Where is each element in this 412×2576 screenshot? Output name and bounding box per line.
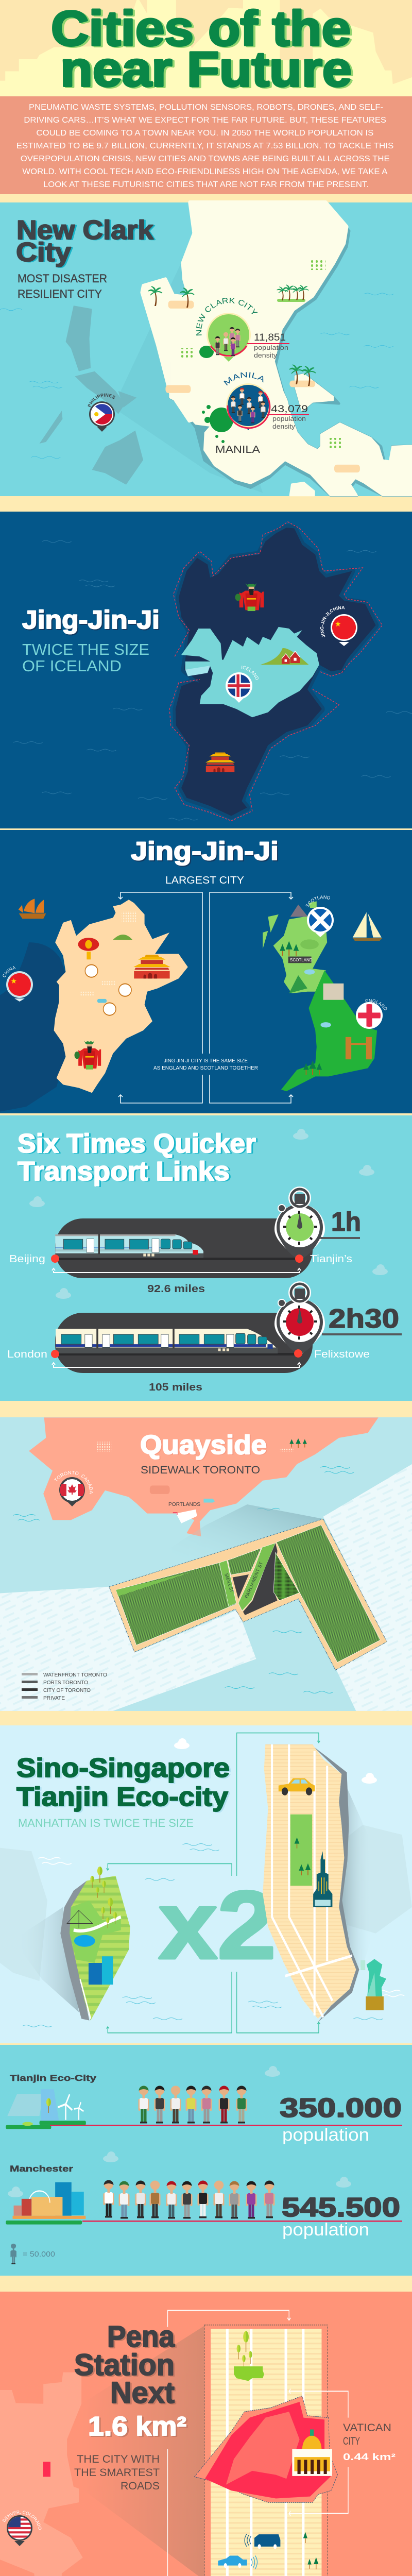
map icons: [133, 955, 170, 978]
comparison note: AS ENGLAND AND SCOTLAND TOGETHER: [153, 1065, 258, 1071]
Iceland: [181, 627, 319, 717]
pin: China: [320, 606, 357, 646]
panel: Jing-Jin-Ji largest city: [0, 830, 412, 1113]
subheading: [22, 640, 149, 675]
legend: [22, 1672, 107, 1701]
map: Denver area: [0, 2326, 204, 2576]
basilica: [292, 2430, 332, 2476]
heading: Tianjin Eco-city: [16, 1782, 228, 1812]
pin: China: ★: [335, 620, 341, 629]
taxi: [279, 1778, 315, 1795]
stat: New Clark density: density: [254, 352, 278, 359]
label: Scotland: SCOTLAND: [290, 958, 313, 962]
clock: 1h: [274, 1189, 325, 1259]
label: Vatican City: 0.44 km²: [343, 2452, 396, 2462]
clouds: [29, 1129, 388, 1299]
legend: PORTS TORONTO: [43, 1680, 88, 1686]
time: 2h30: 2h30: [329, 1304, 399, 1334]
pin: Toronto Canada: TORONTO, CANADA: [54, 1470, 93, 1494]
stat: New Clark density: 11,851: [254, 332, 286, 343]
pin: Philippines: PHILIPPINES: [88, 394, 115, 407]
houses: [260, 648, 308, 665]
distance: 105 miles: 105 miles: [149, 1382, 202, 1393]
stat: 1.6 km2: 1.6 km²: [88, 2412, 186, 2442]
subheading: MOST DISASTER: [18, 272, 107, 285]
heading: Six Times Quicker: [18, 1129, 256, 1159]
intro text panel: [0, 96, 412, 194]
time: 1h: [320, 1207, 361, 1239]
label: Tianjin Eco-City: Tianjin Eco-City: [10, 2073, 97, 2083]
train: China: [55, 1234, 203, 1258]
boat: [353, 912, 382, 941]
stat: New Clark density: [247, 332, 289, 359]
heading: City: [16, 238, 71, 267]
subheading: RESILIENT CITY: [18, 287, 102, 300]
stat: Manila density: density: [272, 423, 296, 430]
legend: person equals 50.000: = 50.000: [23, 2250, 55, 2259]
pin: China small: CHINA: [3, 966, 15, 977]
clouds: [8, 2066, 351, 2197]
route labels: [9, 1253, 352, 1265]
subheading: MANHATTAN IS TWICE THE SIZE: [18, 1817, 194, 1829]
divider: [0, 828, 412, 830]
row: Manchester people: [103, 2180, 275, 2218]
heading: Station: [74, 2348, 175, 2382]
clock: 2h30: [274, 1284, 325, 1354]
map: Quayside plan: [109, 1519, 387, 1670]
stat: Manila density: population: [272, 415, 306, 422]
route: London to Felixstowe: [52, 1313, 313, 1373]
comparison note: [153, 1058, 258, 1071]
legend: WATERFRONT TORONTO: [43, 1672, 107, 1678]
intro text panel: OVERPOPULATION CRISIS, NEW CITIES AND TOWNS ARE BEING BUILT ALL ACROSS THE: [21, 155, 390, 163]
decorative waves: [13, 540, 412, 820]
train: UK: [56, 1329, 278, 1353]
distance: 92.6 miles: 92.6 miles: [147, 1283, 205, 1295]
label: population: population: [282, 2125, 369, 2145]
map: Scotland and England: [263, 901, 377, 1091]
waves: [13, 1466, 354, 1693]
heading: [74, 2320, 175, 2410]
subheading: THE CITY WITH: [77, 2453, 160, 2465]
map: street plan with Vatican overlay: [195, 2325, 338, 2576]
row: Tianjin people: [138, 2086, 247, 2124]
pin: England: [356, 999, 387, 1029]
route labels: Beijing: [9, 1253, 45, 1265]
subheading: THE SMARTEST: [74, 2467, 160, 2479]
intro text panel: WORLD. WITH COOL TECH AND ECO-FRIENDLINESS HIGH ON THE AGENDA, WE TAKE A: [22, 167, 388, 176]
panel: Jing-Jin-Ji twice the size of Iceland: [0, 512, 412, 828]
palms: [148, 285, 316, 386]
time: 1h: 1h: [331, 1207, 361, 1237]
statue of liberty: [360, 1959, 386, 2010]
header: title on skyline: [0, 0, 412, 97]
panel: Sino-Singapore Tianjin Eco-city: [0, 1725, 412, 2043]
divider: [0, 1113, 412, 1115]
heading: Sino-Singapore: [16, 1753, 230, 1783]
title: [51, 1, 352, 97]
street grid: [0, 1464, 412, 1711]
label: Manila: MANILA: [215, 444, 261, 455]
pin: China small: [3, 966, 33, 1002]
heading: Pena: [107, 2320, 175, 2353]
ship: [19, 899, 46, 919]
heading: Jing-Jin-Ji: [131, 837, 279, 866]
route labels: [7, 1349, 370, 1360]
pin: Scotland: [306, 895, 334, 937]
subheading: LARGEST CITY: [165, 875, 244, 886]
stat: 350.000: 350.000: [280, 2093, 402, 2123]
pin: Philippines: [88, 394, 115, 432]
baseline with bar: [50, 2125, 402, 2126]
map: Philippines and Luzon: [0, 202, 412, 496]
intro text panel: DRIVING CARS…IT’S WHAT WE EXPECT FOR THE FAR FUTURE. BUT, THESE FEATURES: [24, 116, 386, 125]
label: population: population: [282, 2220, 369, 2240]
intro text panel: ESTIMATED TO BE 9.7 BILLION, CURRENTLY, IT STANDS AT 7.53 BILLION. TO TACKLE THIS: [16, 142, 393, 150]
panel: Six Times Quicker transport links: [0, 1115, 412, 1401]
pin: China: JING-JIN-JI,CHINA: [320, 606, 345, 637]
legend: CITY OF TORONTO: [43, 1688, 91, 1693]
panel: Quayside Toronto: [0, 1417, 412, 1711]
skyscraper: [313, 1851, 332, 1907]
stat: Manila density: [267, 404, 309, 430]
heading: New Clark: [16, 215, 153, 245]
map: Manhattan: [263, 1744, 373, 2022]
label: Portlands: PORTLANDS: [168, 1501, 200, 1507]
subheading: [18, 272, 107, 300]
intro text panel: COULD BE COMING TO A TOWN NEAR YOU. IN 2050 THE WORLD POPULATION IS: [36, 129, 373, 138]
map shadow cone: [108, 1504, 323, 1587]
intro text panel: LOOK AT THESE FUTURISTIC CITIES THAT ARE NOT FAR FROM THE PRESENT.: [43, 180, 369, 189]
sand patches: [165, 301, 360, 472]
map: Jing-Jin-Ji: [54, 900, 188, 1093]
label: Manchester: Manchester: [10, 2164, 73, 2174]
legend: PRIVATE: [43, 1696, 65, 1701]
route: Beijing to Tianjin: [52, 1218, 313, 1278]
icon: Manchester skyline: [6, 2182, 85, 2225]
street labels: [223, 1561, 265, 1599]
route endpoints: [51, 1255, 303, 1263]
background silhouettes and clouds: [0, 1825, 412, 2027]
pin: Manila: [224, 372, 271, 430]
pin: China small: ★: [11, 977, 17, 985]
street labels: PARLIAMENT ST: [244, 1561, 265, 1599]
title: near Future: [60, 42, 352, 97]
label: Vatican City: CITY: [343, 2435, 360, 2447]
stat: New Clark density: population: [254, 344, 288, 351]
comparison note: JING JIN JI CITY IS THE SAME SIZE: [164, 1058, 248, 1064]
heading: Next: [110, 2376, 175, 2410]
land: Toronto: [29, 1417, 379, 1536]
mountains: dark China land: [0, 942, 71, 1112]
car: [218, 2555, 257, 2569]
pin: Manila: MANILA: [224, 372, 264, 385]
stat: 545.500: 545.500: [282, 2193, 400, 2223]
comparison brackets: [107, 1733, 320, 2033]
heading: [16, 1753, 230, 1812]
map: Jing-Jin-Ji with Iceland overlay: [169, 522, 382, 821]
divider: [0, 2043, 412, 2045]
pin: Denver Colorado: DENVER, COLORADO: [2, 2511, 41, 2530]
heading: Jing-Jin-Ji: [22, 605, 160, 634]
forest patches: [199, 346, 233, 443]
panel: New Clark City: [0, 200, 412, 497]
route labels: London: [7, 1349, 47, 1360]
pin: New Clark City: NEW CLARK CITY: [196, 298, 258, 336]
pin: Toronto Canada: [54, 1470, 93, 1506]
pin: Denver Colorado: [2, 2511, 41, 2546]
intro text panel: PNEUMATIC WASTE SYSTEMS, POLLUTION SENSORS, ROBOTS, DRONES, AND SELF-: [29, 103, 383, 112]
title: Cities of the: [51, 1, 351, 56]
subheading: ROADS: [121, 2480, 160, 2492]
skyline silhouette: [0, 0, 412, 84]
label: Vatican City: [343, 2422, 396, 2462]
legend: person equals 50.000: [10, 2244, 55, 2264]
route labels: Tianjin’s: [310, 1253, 352, 1265]
pin: Scotland: SCOTLAND: [306, 895, 330, 907]
subheading: [74, 2453, 160, 2492]
heading: [18, 1129, 256, 1187]
baseline: [82, 2221, 402, 2222]
route endpoints: [51, 1349, 302, 1358]
pin: England: ENGLAND: [365, 999, 387, 1010]
pin: New Clark City: [196, 298, 258, 362]
label: Vatican City: VATICAN: [343, 2422, 391, 2434]
brackets: [168, 2310, 348, 2576]
van: [245, 2534, 280, 2549]
subheading: TWICE THE SIZE: [22, 640, 149, 658]
icon: solar and wind: [6, 2089, 86, 2129]
pin: Iceland: ICELAND: [241, 666, 259, 680]
heading: Transport Links: [18, 1157, 230, 1187]
panel: Pena Station Next: [0, 2292, 412, 2576]
heading: [16, 215, 153, 267]
gate: [205, 752, 235, 772]
comparison brackets: [118, 892, 293, 1103]
subheading: SIDEWALK TORONTO: [141, 1464, 260, 1476]
stat: Manila density: 43,079: [271, 404, 308, 415]
map: Eco-city: [13, 1867, 130, 2021]
heading: Quayside: [140, 1430, 267, 1460]
fields: [179, 260, 343, 448]
emperor: [235, 583, 264, 611]
subheading: OF ICELAND: [22, 657, 122, 675]
pin: Iceland: [226, 666, 259, 703]
x2: x2: [159, 1871, 276, 1979]
street labels: SMALL ST: [223, 1573, 234, 1593]
panel: population comparison: [0, 2045, 412, 2276]
route labels: Felixstowe: [314, 1349, 370, 1360]
